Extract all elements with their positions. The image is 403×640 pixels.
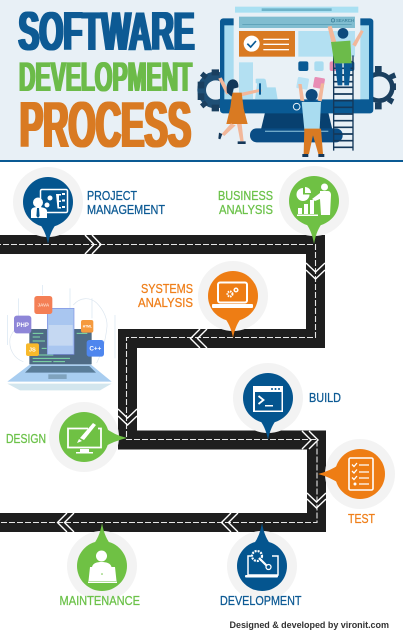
monitor — [220, 17, 373, 113]
badge: JAVA: JAVA — [37, 303, 50, 308]
pin: maintenance — [67, 523, 137, 601]
label: business analysis: BUSINESS — [218, 188, 273, 203]
label: project management — [87, 188, 165, 217]
label: project management: MANAGEMENT — [87, 202, 165, 217]
monitor stand — [250, 113, 343, 142]
panel: header background — [0, 0, 403, 160]
person on ladder — [328, 26, 364, 85]
pin: project management — [13, 167, 83, 244]
laptop base — [7, 364, 112, 390]
screen tiles — [239, 31, 355, 99]
pin: systems analysis — [198, 261, 268, 338]
person with roller — [218, 77, 265, 144]
icon: terminal window — [253, 386, 283, 412]
icon: checklist — [349, 458, 373, 490]
browser top bar — [235, 7, 358, 13]
phone — [47, 308, 74, 354]
label: systems analysis — [138, 281, 193, 310]
laptop screen — [29, 329, 92, 364]
icon: laptop with wrench gear — [245, 551, 278, 578]
icon: monitor with pen — [68, 423, 101, 454]
road — [0, 235, 326, 532]
pin: build — [233, 363, 303, 440]
title: SOFTWARE — [18, 0, 194, 62]
pin: development — [227, 523, 297, 601]
label: build: BUILD — [309, 390, 341, 405]
icon: laptop with gears — [212, 282, 253, 308]
icon: left gear — [198, 69, 230, 111]
person with tiles — [298, 83, 324, 157]
badge: PHP: PHP — [17, 323, 29, 329]
label: business analysis — [218, 188, 273, 217]
illustration: team building a website on a monitor — [198, 7, 396, 157]
chevrons on the road — [58, 235, 326, 532]
search bar: SEARCH — [336, 18, 354, 23]
label: project management: PROJECT — [87, 188, 137, 203]
title: PROCESS — [20, 88, 191, 161]
badge: C++: C++ — [89, 346, 102, 353]
label: test: TEST — [348, 511, 375, 526]
badge: JS: JS — [29, 348, 36, 354]
badge: HTML: HTML — [83, 325, 92, 329]
illustration: laptop with code languages — [7, 285, 115, 390]
icon: presenter with board — [31, 190, 68, 218]
footer credit: Designed & developed by vironit.com — [230, 620, 389, 630]
label: maintenance: MAINTENANCE — [60, 593, 140, 608]
ladder — [334, 55, 353, 151]
icon: right gear — [366, 66, 396, 109]
title — [18, 0, 194, 161]
label: systems analysis: ANALYSIS — [138, 295, 193, 310]
label: business analysis: ANALYSIS — [219, 202, 273, 217]
pin: test — [318, 439, 395, 509]
label: systems analysis: SYSTEMS — [141, 281, 193, 296]
label: design: DESIGN — [6, 431, 46, 446]
label: development: DEVELOPMENT — [220, 593, 302, 608]
icon: analyst with chart — [296, 184, 331, 216]
search bar — [239, 17, 355, 28]
pin: business analysis — [279, 166, 349, 244]
gear outline background — [7, 285, 115, 363]
pin: design — [49, 402, 127, 472]
title: DEVELOPMENT — [19, 53, 192, 100]
icon: person at laptop — [88, 550, 117, 583]
orange card — [239, 31, 295, 57]
